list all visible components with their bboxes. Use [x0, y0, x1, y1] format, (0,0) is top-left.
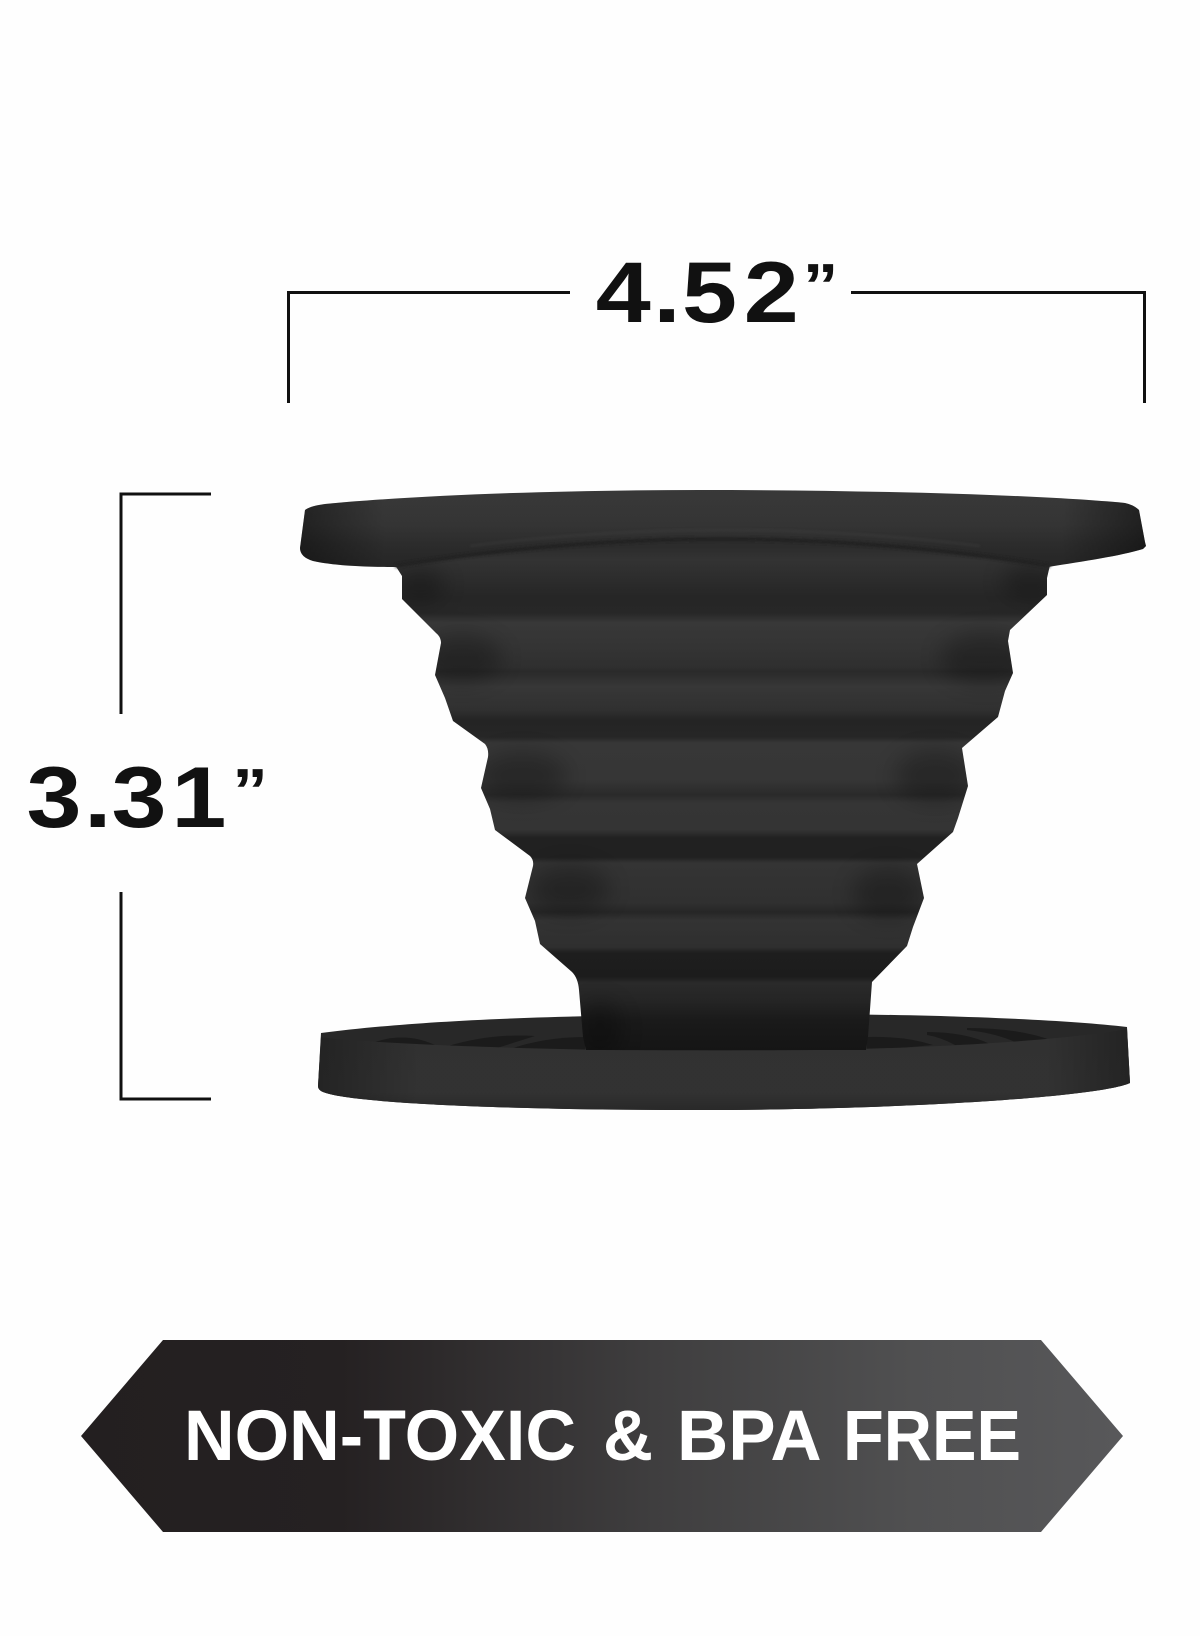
banner text: &	[603, 1397, 653, 1476]
width dimension: bracket and label	[288, 244, 1144, 403]
base front rim	[318, 1029, 1130, 1110]
banner text: NON-TOXIC	[184, 1397, 576, 1476]
width label: ”	[803, 252, 838, 321]
width bracket	[288, 292, 1144, 403]
height dimension: bracket and label	[26, 494, 268, 1099]
flange edge shading	[300, 490, 1146, 567]
height label: 3.31	[26, 749, 226, 846]
infographic canvas	[28, 262, 1146, 1532]
banner shape	[81, 1340, 1123, 1532]
fold shadows	[401, 570, 1049, 1016]
banner text: BPA	[677, 1397, 820, 1476]
bottom base disc	[318, 1014, 1130, 1110]
height label: ”	[232, 757, 268, 826]
width label: 4.52	[596, 244, 799, 341]
height bracket	[121, 494, 211, 1099]
flange lip line	[395, 539, 1050, 566]
banner: non-toxic and BPA free	[81, 1340, 1123, 1532]
base ridges	[372, 1028, 1053, 1050]
flange highlight	[470, 530, 980, 546]
banner text: FREE	[843, 1397, 1021, 1476]
product: collapsible coffee dripper	[300, 490, 1146, 1110]
folded silicone body	[396, 556, 1050, 1050]
rim edge shading	[318, 1029, 1130, 1110]
top flange disc	[300, 490, 1146, 567]
